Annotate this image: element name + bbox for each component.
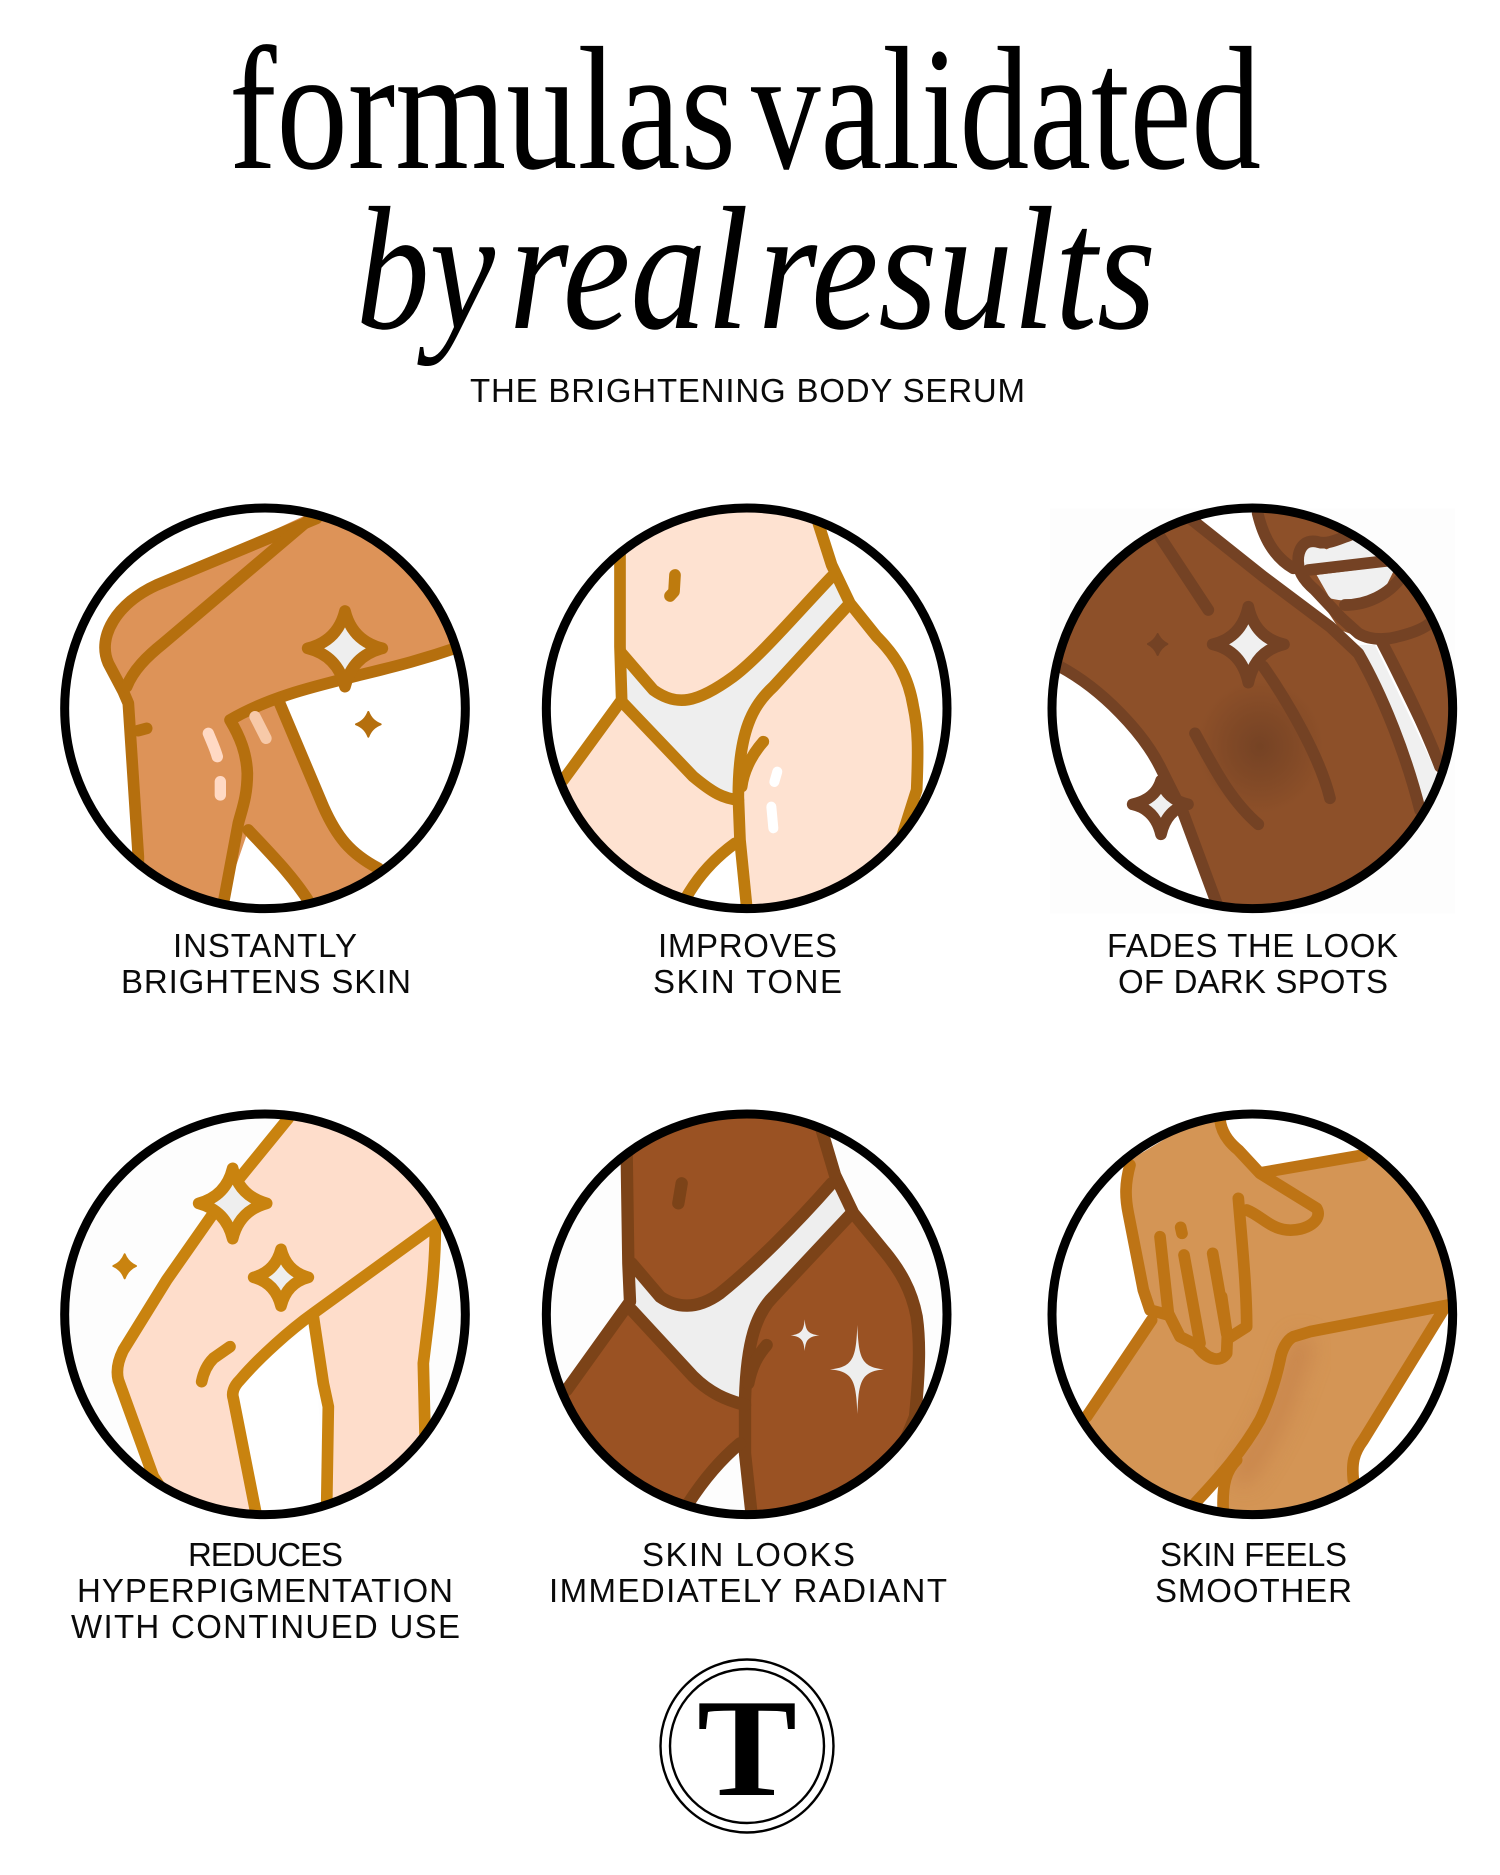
label: IMMEDIATELY RADIANT (549, 1572, 947, 1609)
label (71, 1536, 460, 1645)
shadow (1243, 1347, 1302, 1473)
title line one: validated (751, 12, 1261, 207)
icon: sparkle small (1148, 634, 1167, 655)
panel: skin feels smoother (1052, 1110, 1470, 1609)
title line two (356, 172, 1156, 367)
icon: sparkle medium (254, 1249, 308, 1306)
panel: improves skin tone (537, 503, 947, 1000)
logo: T monogram (660, 1660, 834, 1832)
label: REDUCES (188, 1536, 343, 1573)
ring (65, 508, 465, 909)
ring (546, 1114, 947, 1515)
panel: reduces hyperpigmentation (65, 1113, 480, 1645)
illustration: light skin knee with sparkles (65, 1113, 480, 1540)
icon: white sparkle small (791, 1319, 819, 1351)
highlights (771, 772, 777, 828)
icon: white sparkle large (830, 1325, 884, 1414)
title line one (229, 12, 1261, 207)
icon: sparkle large (199, 1168, 267, 1239)
label (121, 927, 411, 1000)
illustration: dark skin arm with dark spot (1048, 504, 1458, 914)
icon: sparkle lower (1133, 781, 1188, 834)
panel: fades the look of dark spots (1048, 504, 1458, 994)
label: WITH CONTINUED USE (71, 1608, 460, 1645)
ring (1052, 1114, 1453, 1515)
title line two: by (356, 172, 496, 367)
logo: T monogram: T (697, 1671, 797, 1826)
highlights (208, 717, 266, 795)
label: INSTANTLY (173, 927, 357, 964)
label: SMOOTHER (1155, 1572, 1352, 1609)
icon: sparkle small (113, 1254, 136, 1278)
label: SKIN TONE (653, 963, 842, 1000)
subtitle: THE BRIGHTENING BODY SERUM (470, 372, 1025, 409)
label (1155, 1536, 1352, 1609)
illustration: knee with sparkles (65, 508, 480, 923)
label: HYPERPIGMENTATION (77, 1572, 453, 1609)
label: OF DARK SPOTS (1118, 963, 1388, 1000)
label: SKIN FEELS (1160, 1536, 1347, 1573)
dark spot (1217, 702, 1302, 792)
panel: skin looks immediately radiant (537, 1107, 947, 1609)
icon: sparkle small (356, 712, 381, 737)
ring (1052, 508, 1453, 909)
icon: sparkle large (308, 611, 382, 687)
illustration: hips dark skin (537, 1107, 947, 1540)
label (1107, 927, 1398, 1000)
label: BRIGHTENS SKIN (121, 963, 411, 1000)
icon: sparkle large (1213, 607, 1284, 683)
ring (65, 1114, 465, 1515)
title line two: results (758, 172, 1156, 367)
title line two: real (509, 172, 749, 367)
label (549, 1536, 947, 1609)
ring (546, 508, 947, 909)
title line one: formulas (229, 12, 736, 207)
illustration: hips light skin (537, 503, 947, 930)
label: FADES THE LOOK (1107, 927, 1398, 964)
label: SKIN LOOKS (642, 1536, 855, 1573)
illustration: hand on leg (1052, 1110, 1470, 1540)
panel: instantly brightens skin (65, 508, 480, 1000)
label (653, 927, 842, 1000)
label: IMPROVES (658, 927, 837, 964)
title (229, 12, 1261, 367)
